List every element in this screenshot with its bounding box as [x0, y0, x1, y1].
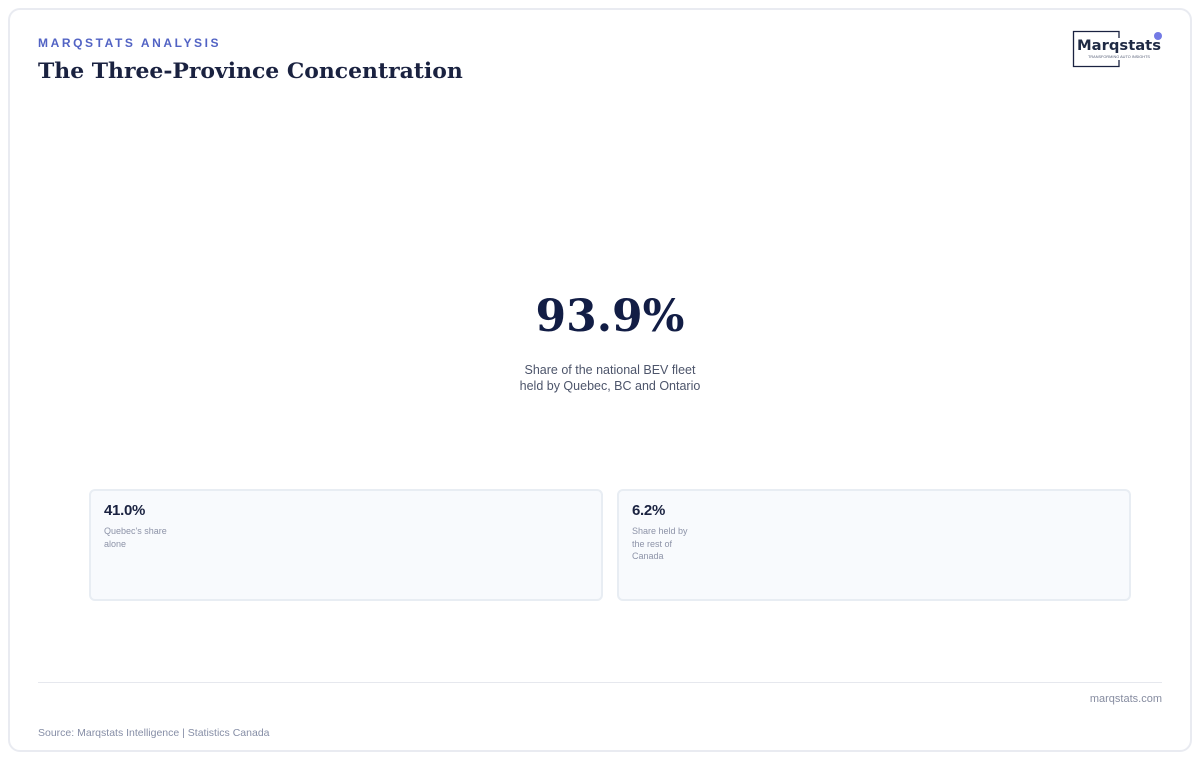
label: Quebec share: Quebec's share: [104, 526, 167, 536]
label: rest of Canada: the rest of: [632, 539, 672, 549]
icon: Marqstats logo: Marqstats: [1077, 38, 1161, 54]
label: rest of Canada: Share held by: [632, 526, 688, 536]
panel: rest of Canada: [617, 489, 1131, 601]
panel: Quebec share: [89, 489, 603, 601]
stat: 41.0%: 41.0%: [104, 502, 145, 519]
eyebrow label: MARQSTATS ANALYSIS: [38, 36, 221, 50]
icon: Marqstats logo: [1072, 30, 1162, 68]
website: marqstats.com: [1090, 693, 1162, 705]
hero statistic: 93.9%: [536, 291, 684, 342]
label: Quebec share: [104, 526, 167, 549]
label: rest of Canada: [632, 526, 688, 561]
hero description: [520, 363, 700, 393]
hero description: held by Quebec, BC and Ontario: [520, 379, 700, 393]
title: The Three-Province Concentration: [38, 58, 463, 84]
label: rest of Canada: Canada: [632, 551, 664, 561]
label: Quebec share: alone: [104, 539, 126, 549]
stat: 6.2%: 6.2%: [632, 502, 665, 519]
source note: Source: Marqstats Intelligence | Statistics Canada: [38, 727, 270, 739]
icon: Marqstats logo: TRANSFORMING AUTO INSIGHTS: [1088, 55, 1151, 59]
hero description: Share of the national BEV fleet: [525, 363, 695, 377]
